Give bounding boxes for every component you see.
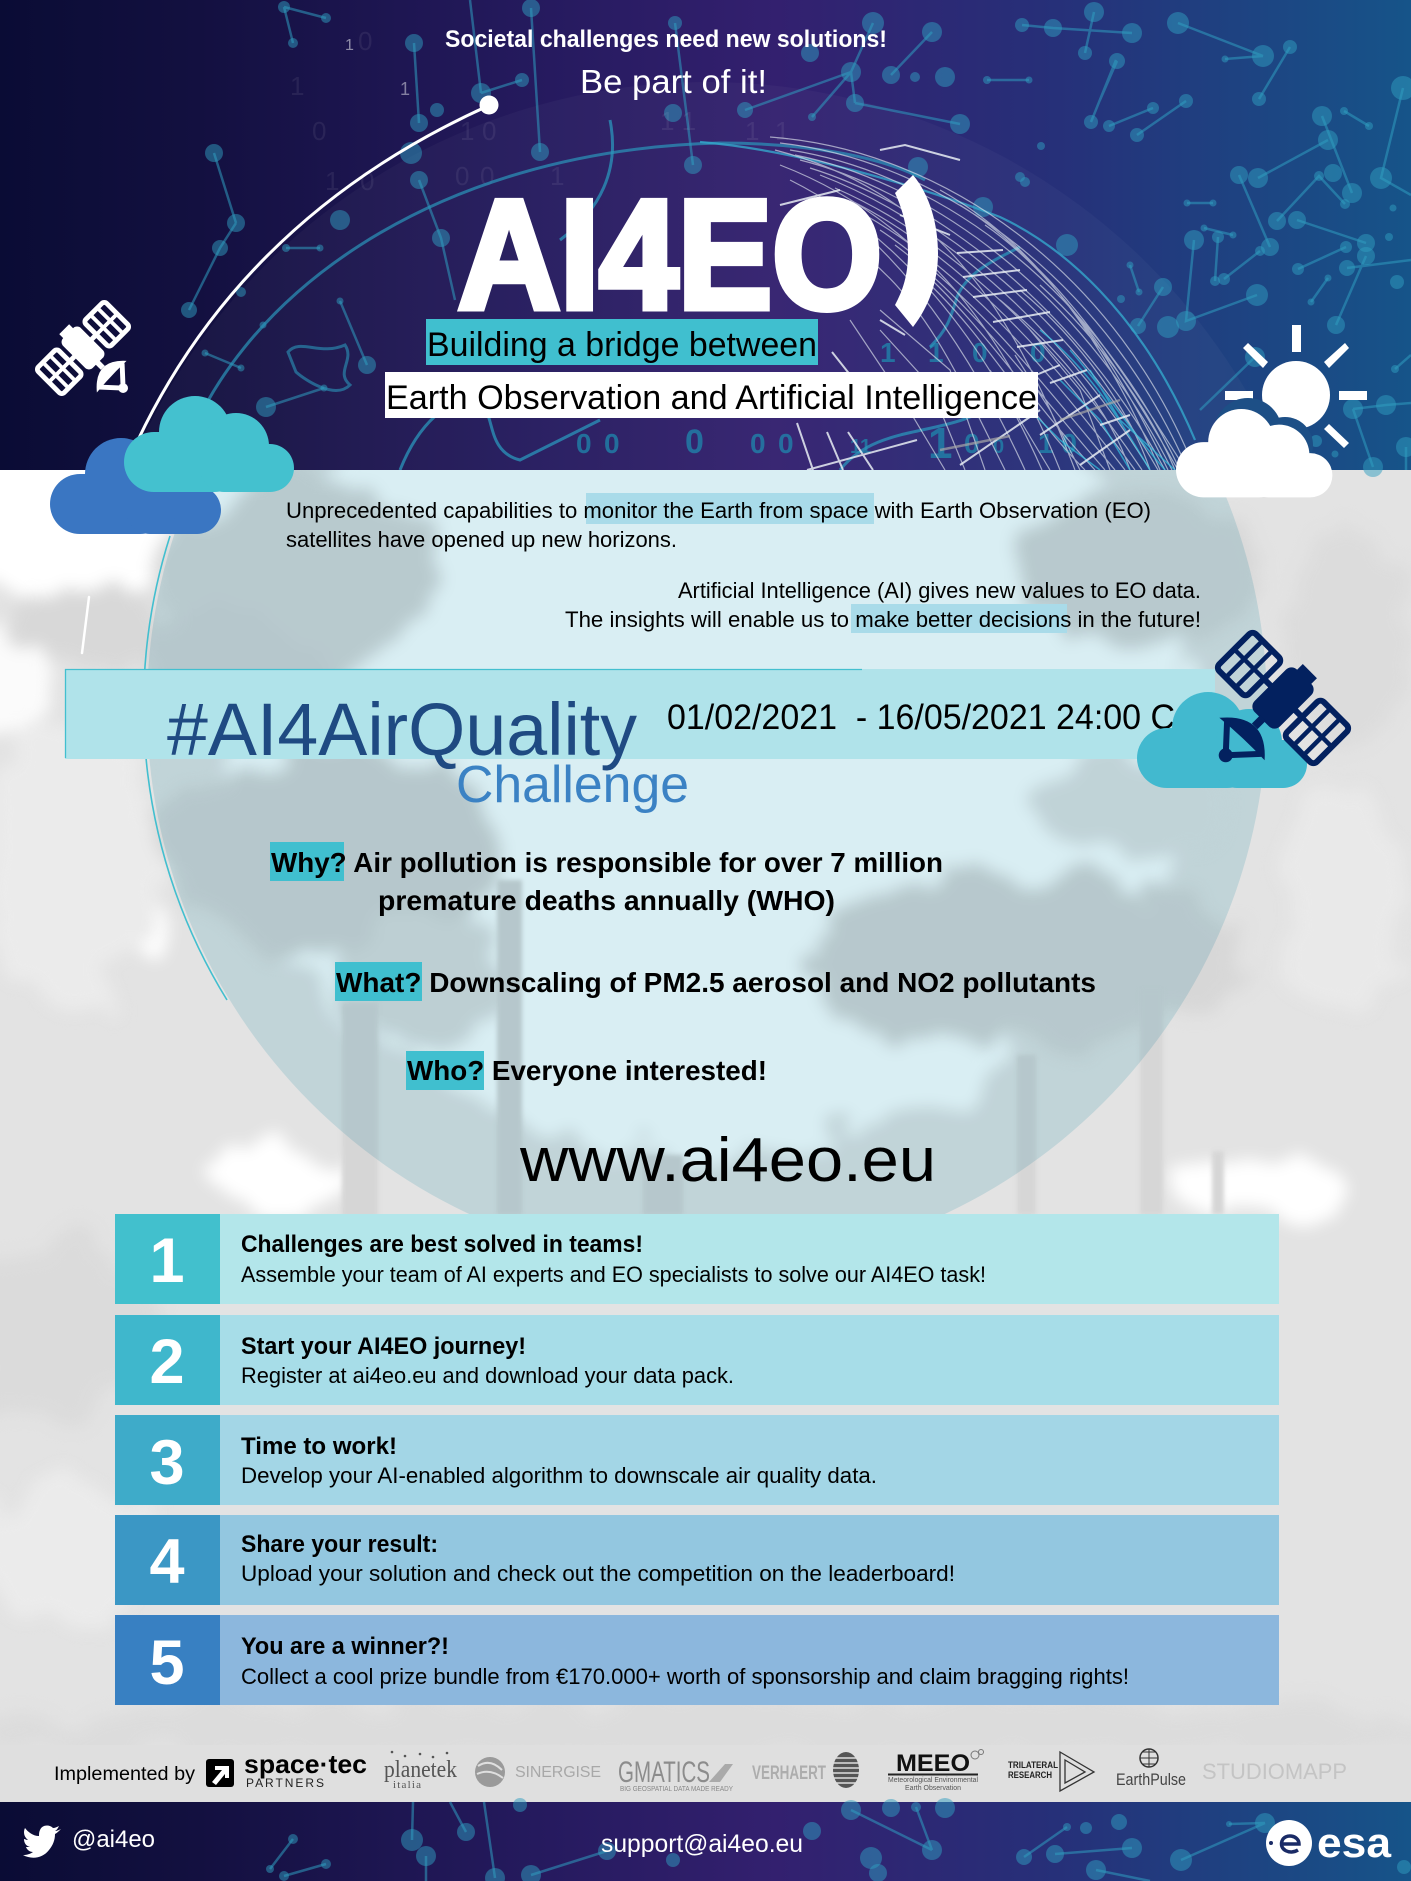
step 5: 5 — [149, 1628, 185, 1698]
logo: sinergise — [475, 1757, 601, 1787]
why block: Why? Air pollution is responsible for over 7 million — [271, 847, 943, 878]
step 5: You are a winner?! — [241, 1633, 449, 1660]
icon: white cloud — [1176, 409, 1332, 497]
step 2: 2 — [149, 1327, 185, 1397]
challenge name: #AI4AirQuality — [167, 688, 637, 771]
what block: What? Downscaling of PM2.5 aerosol and NO2 pollutants — [336, 967, 1096, 998]
why block: premature deaths annually (WHO) — [378, 885, 835, 916]
logo: meeo: Meteorological Environmental — [888, 1777, 978, 1784]
circle edge — [144, 536, 227, 1000]
binary digits: 1 — [745, 116, 759, 146]
website url: www.ai4eo.eu — [519, 1126, 936, 1195]
icon: teal cloud behind navy satellite — [1137, 692, 1307, 788]
icon: teal cloud — [124, 396, 294, 492]
binary digits — [290, 26, 1077, 468]
logo: space-tec partners: space·tec — [244, 1749, 367, 1779]
binary digits: 0 — [455, 161, 469, 191]
challenge subtitle: Challenge — [456, 756, 689, 814]
binary digits: 1 — [345, 37, 354, 54]
twitter handle: @ai4eo — [72, 1826, 155, 1853]
binary digits: 11 — [850, 436, 871, 458]
step 1: 1 — [149, 1226, 185, 1296]
binary digits: 1 — [550, 161, 564, 191]
binary digits: 0 — [480, 161, 494, 191]
logo: meeo: Earth Observation — [905, 1785, 961, 1792]
logo: sinergise: SINERGISE — [515, 1764, 601, 1781]
implemented by label: Implemented by — [54, 1764, 196, 1785]
icon: sun behind white cloud — [1214, 325, 1367, 473]
support email: support@ai4eo.eu — [601, 1830, 803, 1858]
binary digits: 0 — [1030, 337, 1046, 368]
binary digits: 0 — [685, 423, 704, 461]
who block: Who? Everyone interested! — [407, 1055, 767, 1086]
step 3: Develop your AI-enabled algorithm to downscale air quality data. — [241, 1463, 877, 1488]
logo: earthpulse: EarthPulse — [1116, 1770, 1186, 1789]
step 1 — [115, 1214, 1279, 1304]
steps list — [115, 1214, 1279, 1705]
binary digits: 0 — [972, 337, 988, 368]
icon: twitter bird — [23, 1826, 61, 1858]
intro text 2 — [565, 578, 1201, 633]
binary digits: 1 1 — [660, 106, 696, 136]
binary digits: 1 — [775, 116, 789, 146]
binary digits: 0 — [576, 428, 592, 459]
binary digits: 0 — [360, 166, 374, 196]
partner strip — [0, 1745, 1411, 1802]
top slogan — [445, 26, 887, 100]
binary digits: 1 — [460, 116, 474, 146]
challenge banner — [65, 669, 1215, 771]
big light-blue circle — [148, 470, 1267, 1214]
intro text 2: The insights will enable us to make better decisions in the future! — [565, 607, 1201, 632]
step 1: Challenges are best solved in teams! — [241, 1231, 643, 1258]
logo: trilateral research: TRILATERAL — [1008, 1760, 1058, 1770]
logo: trilateral research: RESEARCH — [1008, 1770, 1052, 1780]
step 4 — [115, 1515, 1279, 1605]
binary digits: 1 — [928, 337, 944, 368]
logo: space-tec partners — [206, 1749, 367, 1790]
logo: meeo: MEEO — [896, 1750, 970, 1777]
binary digits: 1 — [928, 419, 952, 468]
logo: gmatics: BIG GEOSPATIAL DATA MADE READY — [620, 1784, 733, 1793]
step 4: 4 — [149, 1527, 185, 1597]
step 3: 3 — [149, 1428, 185, 1498]
footer band — [0, 1798, 1411, 1881]
binary digits: 0 — [964, 428, 980, 459]
logo: planetek italia: planetek — [384, 1757, 457, 1783]
binary digits: 1 — [325, 166, 339, 196]
logo: trilateral research — [1008, 1752, 1094, 1791]
subtitle line 1: Building a bridge between — [427, 326, 817, 364]
globe outline and circuit lines — [178, 120, 1195, 470]
step 2 — [115, 1315, 1279, 1405]
binary digits: 1 0 — [1038, 428, 1077, 459]
logo: verhaert: VERHAERT — [752, 1763, 826, 1784]
binary digits: 0 — [312, 116, 326, 146]
step 2: Start your AI4EO journey! — [241, 1333, 526, 1360]
binary digits: 0 — [778, 428, 794, 459]
step 4: Share your result: — [241, 1531, 438, 1558]
logo: esa — [1266, 1819, 1392, 1866]
binary digits: 1 — [880, 337, 896, 368]
header network of nodes — [181, 0, 1411, 477]
binary digits: 1 — [400, 79, 410, 99]
challenge dates: 01/02/2021 - 16/05/2021 24:00 C — [667, 698, 1175, 737]
intro text 1: satellites have opened up new horizons. — [286, 527, 677, 552]
top slogan: Societal challenges need new solutions! — [445, 26, 887, 53]
step 3 — [115, 1415, 1279, 1505]
background: smoke and chimneys — [0, 470, 1411, 1745]
step 5 — [115, 1615, 1279, 1705]
binary digits: 0 — [750, 428, 766, 459]
logo: studiomapp: STUDIOMAPP — [1202, 1759, 1347, 1784]
orbit arc — [82, 96, 498, 653]
subtitle line 2: Earth Observation and Artificial Intelligence — [386, 379, 1037, 417]
logo: planetek italia: italia — [393, 1779, 421, 1791]
logo: space-tec partners: PARTNERS — [246, 1776, 324, 1790]
header background — [0, 0, 1411, 470]
logo: verhaert — [752, 1752, 859, 1788]
intro text 1 — [286, 493, 1151, 552]
binary digits: 0 — [604, 428, 620, 459]
icon: navy satellite — [1172, 622, 1359, 809]
logo: earthpulse — [1116, 1749, 1186, 1789]
why block — [270, 842, 943, 916]
logo: gmatics: GMATICS — [618, 1756, 710, 1789]
logo: esa: esa — [1317, 1819, 1392, 1866]
AI4EO logo: AI4EO — [458, 168, 882, 341]
icon: blue cloud — [50, 438, 221, 534]
step 3: Time to work! — [241, 1433, 397, 1460]
top slogan: Be part of it! — [580, 63, 767, 100]
logo: planetek italia — [384, 1751, 457, 1791]
binary digits: 0 — [482, 116, 496, 146]
logo: meeo — [888, 1750, 984, 1792]
intro text 1: Unprecedented capabilities to monitor the Earth from space with Earth Observation (EO) — [286, 498, 1151, 523]
icon: white satellite — [30, 295, 161, 426]
binary digits: 0 — [358, 26, 372, 56]
binary digits: 1 — [290, 71, 304, 101]
binary digits: 0 — [993, 436, 1004, 458]
step 2: Register at ai4eo.eu and download your data pack. — [241, 1363, 734, 1388]
step 1: Assemble your team of AI experts and EO specialists to solve our AI4EO task! — [241, 1262, 986, 1287]
step 5: Collect a cool prize bundle from €170.000+ worth of sponsorship and claim bragging rights! — [241, 1664, 1129, 1689]
intro text 2: Artificial Intelligence (AI) gives new values to EO data. — [678, 578, 1201, 603]
step 4: Upload your solution and check out the competition on the leaderboard! — [241, 1561, 955, 1586]
